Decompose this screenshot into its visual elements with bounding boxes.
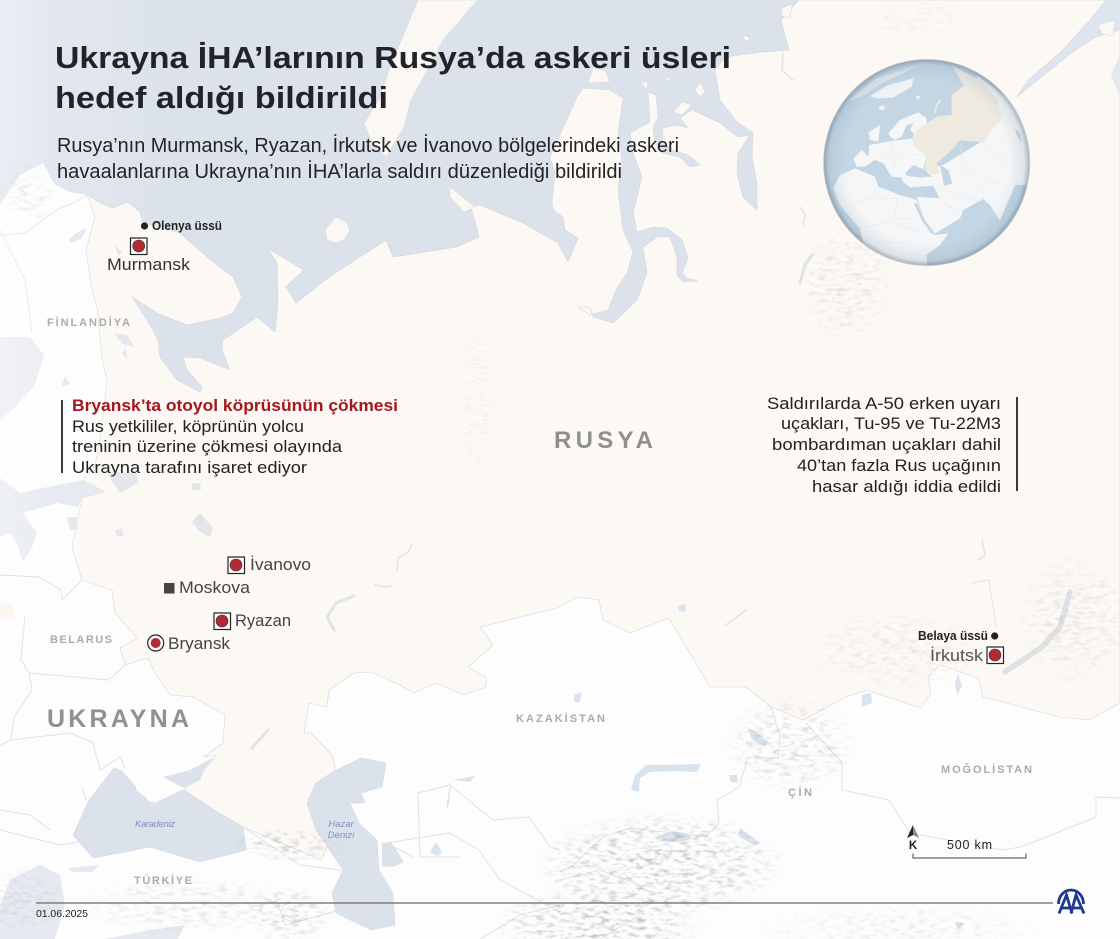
right edge inlet (1111, 55, 1120, 97)
sea label: Karadeniz: Karadeniz (135, 819, 175, 830)
title (55, 40, 731, 115)
north arrow (907, 825, 919, 852)
callout: damaged aircraft (767, 395, 1018, 496)
sea label: Hazar Denizi (328, 819, 355, 841)
callout: Bryansk bridge collapse: treninin üzerine çökmesi olayında (72, 438, 343, 456)
country label: Çin: ÇİN (788, 786, 812, 799)
north arrow: K (909, 840, 918, 852)
callout: damaged aircraft: bombardıman uçakları dahil (772, 436, 1001, 454)
footer rule (36, 902, 1053, 904)
black sea (73, 768, 246, 862)
country label: Kazakistan: KAZAKİSTAN (516, 712, 605, 725)
subtitle (57, 134, 679, 183)
subtitle: Rusya’nın Murmansk, Ryazan, İrkutsk ve İvanovo bölgelerindeki askeri (57, 134, 679, 157)
Irkutsk marker: İrkutsk (930, 646, 984, 665)
country label: Finlandiya: FİNLANDİYA (47, 316, 130, 329)
arctic islands (325, 0, 1115, 243)
crimea (136, 773, 182, 803)
laptev sea inlet (1017, 0, 1120, 97)
russia on globe (913, 65, 1002, 175)
country label: Türkiye: TÜRKİYE (134, 874, 192, 887)
inner seas (905, 165, 932, 178)
central asian lakes (430, 604, 965, 930)
Belaya base marker: Belaya üssü (918, 629, 988, 643)
locator globe (823, 59, 1030, 266)
Irkutsk marker (930, 646, 1004, 665)
Murmansk marker (107, 238, 191, 274)
left edge fade (0, 0, 170, 565)
globe country borders (840, 141, 1020, 245)
country label: Ukrayna: UKRAYNA (47, 705, 189, 733)
Anadolu Agency logo (1058, 890, 1084, 914)
eurasia (853, 75, 1040, 221)
arabia (917, 197, 963, 233)
callout: damaged aircraft: hasar aldığı iddia edildi (812, 478, 1001, 496)
africa (833, 168, 948, 275)
lake baikal (1005, 592, 1070, 672)
callout: Bryansk bridge collapse: Ukrayna tarafını işaret ediyor (72, 459, 308, 477)
caspian sea (307, 758, 395, 930)
Ivanovo marker: İvanovo (250, 555, 311, 574)
callout: damaged aircraft: uçakları, Tu-95 ve Tu-22M3 (781, 415, 1001, 433)
title: Ukrayna İHA’larının Rusya’da askeri üsleri (55, 40, 731, 75)
arctic lands (847, 64, 920, 102)
callout: Bryansk bridge collapse (61, 396, 398, 477)
Olenya base marker: Olenya üssü (152, 219, 222, 233)
volga reservoirs (327, 596, 354, 630)
greenland (869, 78, 913, 98)
scale bar: 500 km (947, 838, 992, 852)
callout: Bryansk bridge collapse: Bryansk’ta otoyol köprüsünün çökmesi (72, 396, 398, 415)
baltic sea (0, 337, 44, 420)
novaya zemlya (935, 100, 941, 113)
azov sea (163, 756, 216, 788)
scale bar (913, 838, 1026, 858)
country label: Belarus: BELARUS (50, 634, 112, 646)
scandinavia (888, 112, 927, 140)
sea label: Hazar Denizi: Denizi (328, 830, 355, 841)
Bryansk marker: Bryansk (168, 634, 230, 653)
sea label: Hazar Denizi: Hazar (328, 819, 355, 830)
uk (868, 125, 880, 142)
callout: damaged aircraft: Saldırılarda A-50 erken uyarı (767, 395, 1001, 413)
garabogaz (382, 843, 404, 867)
Moscow marker: Moskova (179, 578, 251, 597)
marmara and aegean (0, 865, 185, 939)
date: 01.06.2025 (36, 908, 88, 920)
kaliningrad (0, 603, 16, 617)
callout: damaged aircraft: 40’tan fazla Rus uçağının (797, 457, 1001, 475)
country label: Rusya: RUSYA (554, 427, 653, 454)
subtitle: havaalanlarına Ukrayna’nın İHA’larla saldırı düzenlediği bildirildi (57, 160, 622, 183)
country borders (0, 195, 1120, 939)
arctic sea (0, 0, 810, 400)
country label: Moğolistan: MOĞOLİSTAN (941, 763, 1032, 776)
Ryazan marker: Ryazan (235, 611, 291, 630)
Murmansk marker: Murmansk (107, 255, 191, 274)
lakes (62, 227, 213, 537)
title: hedef aldığı bildirildi (55, 80, 388, 115)
callout: Bryansk bridge collapse: Rus yetkililer, köprünün yolcu (72, 418, 304, 436)
